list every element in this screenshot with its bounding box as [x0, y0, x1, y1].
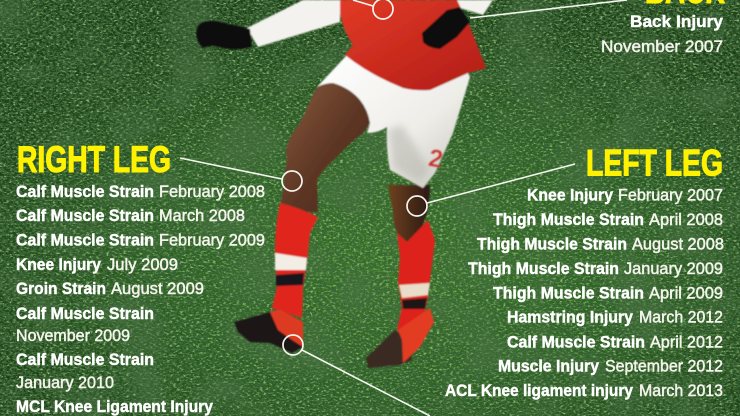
right leg row 2: Calf Muscle Strain: [16, 206, 154, 225]
right leg row 1: [16, 182, 265, 201]
panel: back: [601, 0, 725, 56]
right leg row 4: Knee Injury: [16, 255, 101, 274]
left leg row 4: Thigh Muscle Strain: [468, 259, 619, 278]
pointer: left leg: [427, 164, 575, 203]
marker: back: [373, 0, 393, 19]
left leg row 4: January 2009: [624, 259, 723, 278]
left sock: [397, 220, 435, 340]
right leg row 7: [16, 350, 154, 392]
marker: left leg: [407, 196, 427, 216]
back injury: Back Injury: [630, 12, 724, 31]
pointer: chest to top: [353, 0, 373, 6]
right leg row 6: Calf Muscle Strain: [16, 304, 154, 323]
right leg row 3: February 2009: [159, 230, 265, 250]
left leg row 9: ACL Knee ligament injury: [445, 381, 633, 400]
left glove: [196, 21, 252, 49]
left leg row 3: August 2008: [632, 234, 724, 253]
marker: right leg: [282, 171, 302, 191]
left leg row 8: Muscle Injury: [498, 357, 600, 376]
pointer: back: [470, 0, 627, 18]
pointer: right boot: [302, 350, 430, 416]
left leg row 4: [468, 259, 723, 278]
right glove: [422, 7, 470, 49]
marker: right boot: [283, 335, 303, 355]
right leg row 3: Calf Muscle Strain: [16, 230, 154, 250]
shirt: [340, 0, 486, 90]
right leg skin: [280, 83, 370, 212]
left leg row 8: September 2012: [605, 357, 723, 376]
left leg row 2: Thigh Muscle Strain: [493, 210, 644, 229]
back injury date: November 2007: [601, 37, 723, 56]
left leg row 1: February 2007: [618, 186, 723, 205]
panel: right leg: [16, 139, 265, 416]
right leg row 6: [16, 304, 154, 345]
left sock black band: [402, 298, 427, 309]
left leg row 3: Thigh Muscle Strain: [477, 234, 627, 253]
right leg row 4: [16, 255, 178, 274]
shorts number 2: 2: [427, 144, 445, 174]
right leg row 2: [16, 206, 245, 225]
left leg row 5: April 2009: [649, 283, 723, 302]
right boot: [234, 309, 303, 353]
panel: left leg: [445, 142, 724, 400]
left leg row 7: April 2012: [650, 332, 723, 351]
left leg row 2: April 2008: [649, 210, 723, 229]
left leg row 5: Thigh Muscle Strain: [493, 283, 644, 302]
player figure: [196, 0, 493, 368]
right leg row 1: Calf Muscle Strain: [16, 182, 154, 201]
left sleeve: [247, 0, 340, 47]
left leg skin: [388, 185, 430, 242]
left leg row 1: Knee Injury: [527, 186, 613, 205]
left sock white band: [399, 283, 430, 298]
left leg row 3: [477, 234, 724, 253]
left leg row 7: [507, 332, 723, 351]
right leg row 3: [16, 230, 265, 250]
shorts: [317, 55, 470, 188]
right leg row 5: [16, 279, 204, 298]
left leg row 6: [507, 308, 723, 327]
right leg row 8: MCL Knee Ligament Injury: [16, 397, 213, 416]
right sleeve: [457, 0, 493, 15]
right leg row 6: November 2009: [16, 326, 130, 345]
shorts shading: [388, 125, 430, 182]
right leg row 4: July 2009: [107, 255, 178, 274]
left boot: [366, 308, 434, 368]
left leg row 9: March 2013: [639, 381, 723, 400]
left leg row 6: March 2012: [639, 308, 723, 327]
right sock white band: [275, 253, 307, 270]
left leg row 6: Hamstring Injury: [507, 308, 633, 327]
right sock black band: [276, 273, 304, 286]
right leg row 7: January 2010: [16, 373, 114, 392]
right leg row 1: February 2008: [159, 182, 265, 201]
heading: right leg: RIGHT LEG: [17, 139, 171, 180]
right leg row 5: Groin Strain: [16, 279, 106, 298]
right leg row 2: March 2008: [159, 206, 245, 225]
right sock: [272, 203, 318, 318]
right leg row 5: August 2009: [111, 279, 204, 298]
left leg row 7: Calf Muscle Strain: [507, 332, 645, 351]
pointer: right leg: [180, 158, 282, 179]
left leg row 1: [527, 186, 723, 205]
left leg row 8: [498, 357, 723, 376]
right leg row 7: Calf Muscle Strain: [16, 350, 154, 369]
